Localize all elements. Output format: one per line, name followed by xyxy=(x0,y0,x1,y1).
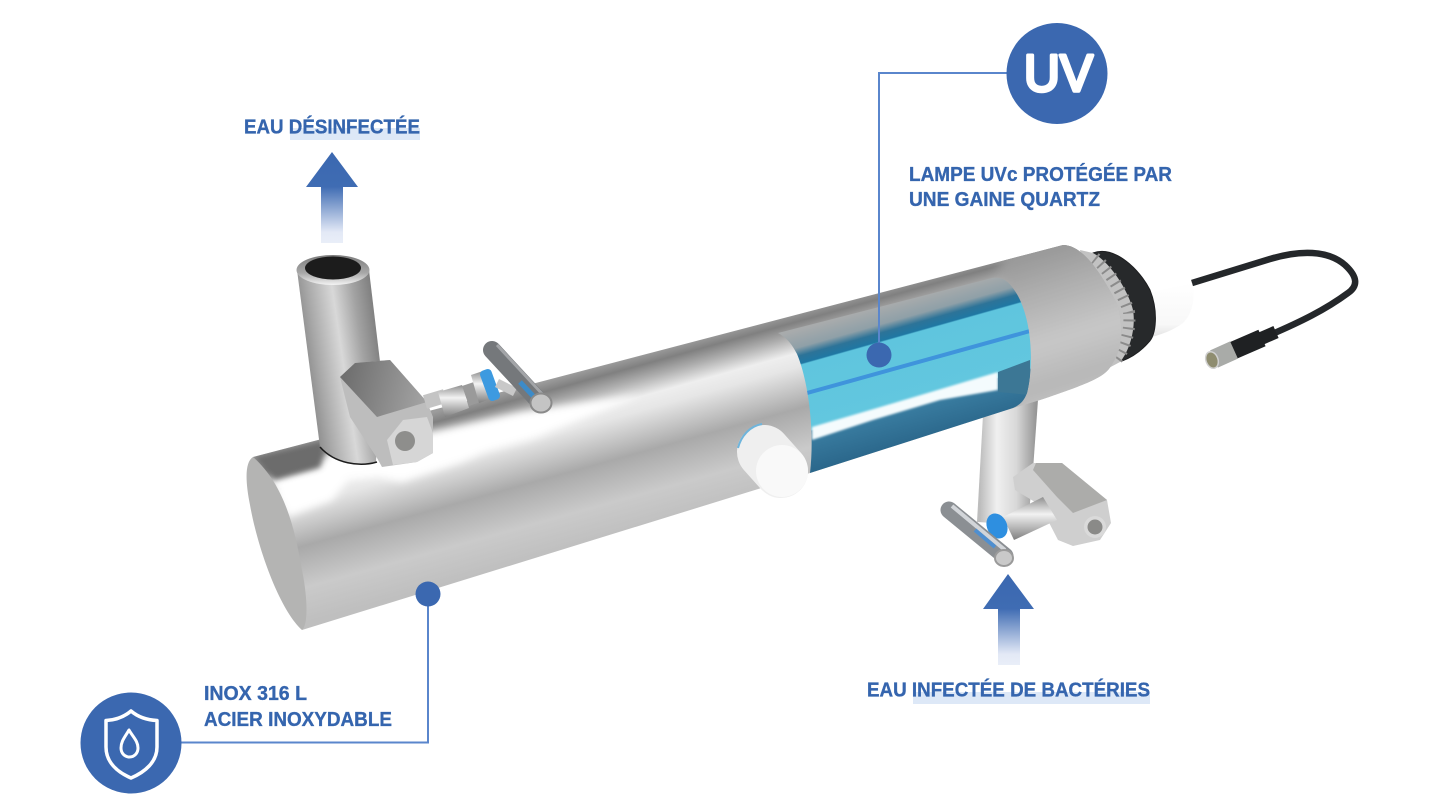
label: stainless steel xyxy=(204,682,392,731)
knurled collar xyxy=(1080,250,1134,370)
power cable xyxy=(1192,253,1355,370)
upper pipe xyxy=(296,255,381,464)
quartz sleeve window xyxy=(778,278,1031,473)
arrow: inlet xyxy=(983,574,1034,665)
black knurled ring xyxy=(1093,251,1155,361)
lamp glass highlight xyxy=(812,372,998,440)
label: lamp: UNE GAINE QUARTZ xyxy=(909,188,1100,211)
marker: lamp xyxy=(866,342,892,368)
upper blue ring xyxy=(479,368,501,402)
main stainless tube xyxy=(253,245,1121,630)
white end cap xyxy=(1145,283,1193,338)
UV badge: UV xyxy=(1024,45,1093,103)
connector: stainless steel xyxy=(178,594,428,742)
lower elbow block xyxy=(1013,463,1111,546)
UV lamp device illustration xyxy=(247,225,1355,630)
upper elbow block xyxy=(340,360,433,467)
label: lamp: LAMPE UVc PROTÉGÉE PAR xyxy=(909,163,1172,186)
tube right section shading xyxy=(997,245,1121,408)
upper valve fitting xyxy=(425,371,491,417)
shield badge xyxy=(80,692,182,794)
label: lamp xyxy=(909,163,1172,211)
surface highlights xyxy=(253,395,640,517)
arrow: outlet xyxy=(306,152,358,243)
UV lamp centre line xyxy=(800,331,1030,395)
label: stainless steel: INOX 316 L xyxy=(204,682,307,705)
label: inlet: EAU INFECTÉE DE BACTÉRIES xyxy=(867,678,1150,702)
lower blue ring xyxy=(982,510,1012,542)
lower pipe xyxy=(977,400,1038,525)
label: stainless steel: ACIER INOXYDABLE xyxy=(204,708,392,731)
upper T handle xyxy=(492,345,552,412)
lower valve fitting xyxy=(1003,497,1057,540)
white knob xyxy=(738,424,808,497)
marker: stainless steel xyxy=(416,582,440,606)
connector: UV lamp xyxy=(879,73,1010,355)
flat left end face xyxy=(247,457,306,630)
label: outlet: EAU DÉSINFECTÉE xyxy=(244,116,420,138)
lower T handle xyxy=(949,506,1013,566)
UV badge xyxy=(1006,23,1108,124)
